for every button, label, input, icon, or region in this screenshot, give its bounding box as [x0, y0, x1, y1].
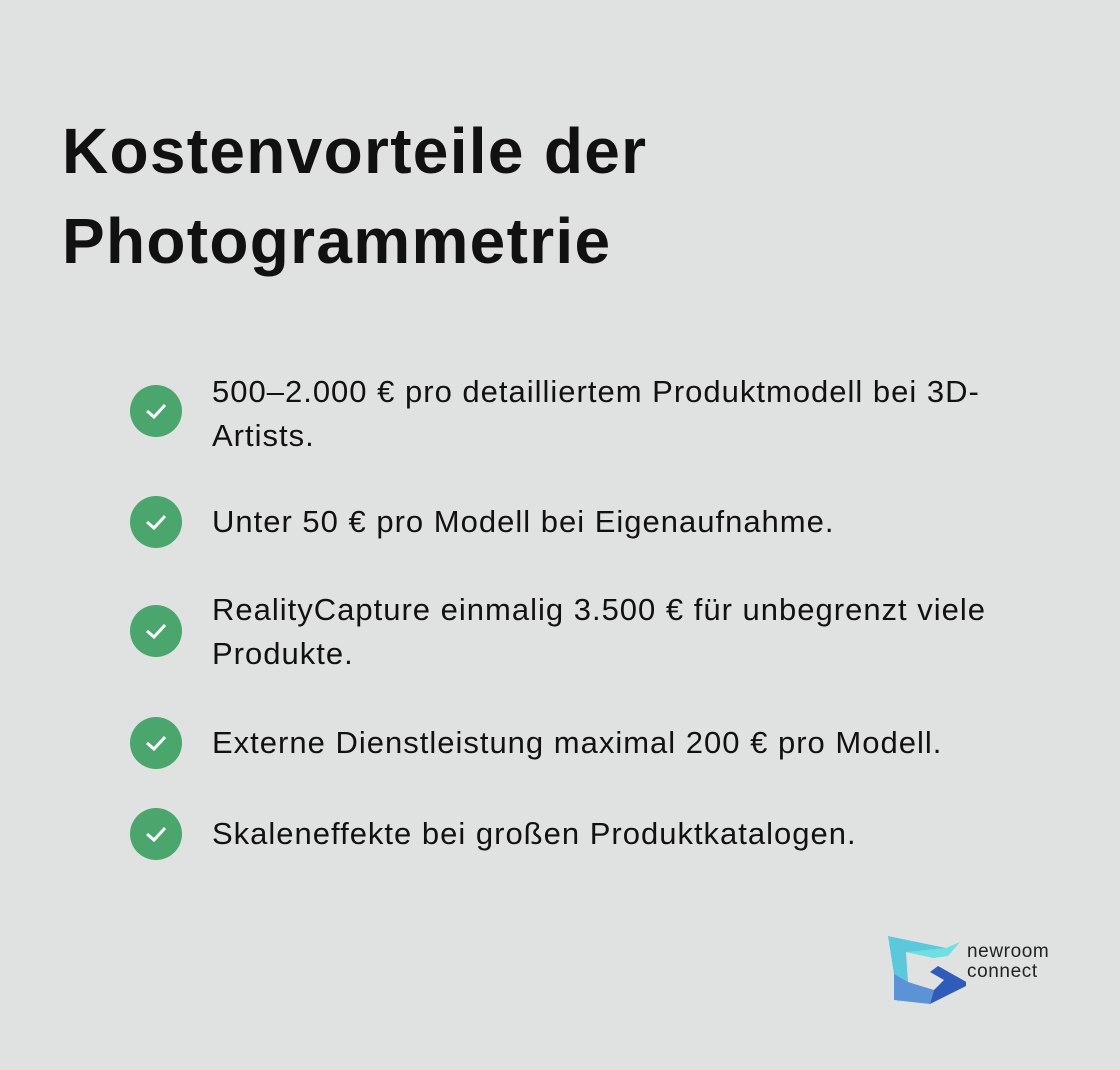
text 1: Artists.	[212, 418, 315, 453]
text 1	[212, 374, 980, 453]
text 2: Unter 50 € pro Modell bei Eigenaufnahme.	[212, 504, 834, 539]
icon: check	[130, 385, 182, 437]
item 3	[130, 592, 986, 671]
title: Kostenvorteile der	[62, 115, 647, 187]
logo text	[967, 941, 1049, 982]
icon: check	[130, 717, 182, 769]
text 5: Skaleneffekte bei großen Produktkatalogen.	[212, 816, 857, 851]
item 2	[130, 496, 834, 548]
icon: logo mark	[888, 936, 966, 1004]
title	[62, 115, 647, 277]
text 3: RealityCapture einmalig 3.500 € für unbegrenzt viele	[212, 592, 986, 627]
icon: check	[130, 496, 182, 548]
item 1	[130, 374, 980, 453]
logo text: newroom	[967, 941, 1049, 962]
icon: check	[130, 808, 182, 860]
item 5	[130, 808, 857, 860]
logo text: connect	[967, 961, 1038, 982]
text 4: Externe Dienstleistung maximal 200 € pro Modell.	[212, 725, 942, 760]
item 4	[130, 717, 942, 769]
text 1: 500–2.000 € pro detailliertem Produktmodell bei 3D-	[212, 374, 980, 409]
icon: check	[130, 605, 182, 657]
text 3: Produkte.	[212, 636, 354, 671]
title: Photogrammetrie	[62, 205, 611, 277]
text 3	[212, 592, 986, 671]
logo	[888, 936, 1049, 1004]
